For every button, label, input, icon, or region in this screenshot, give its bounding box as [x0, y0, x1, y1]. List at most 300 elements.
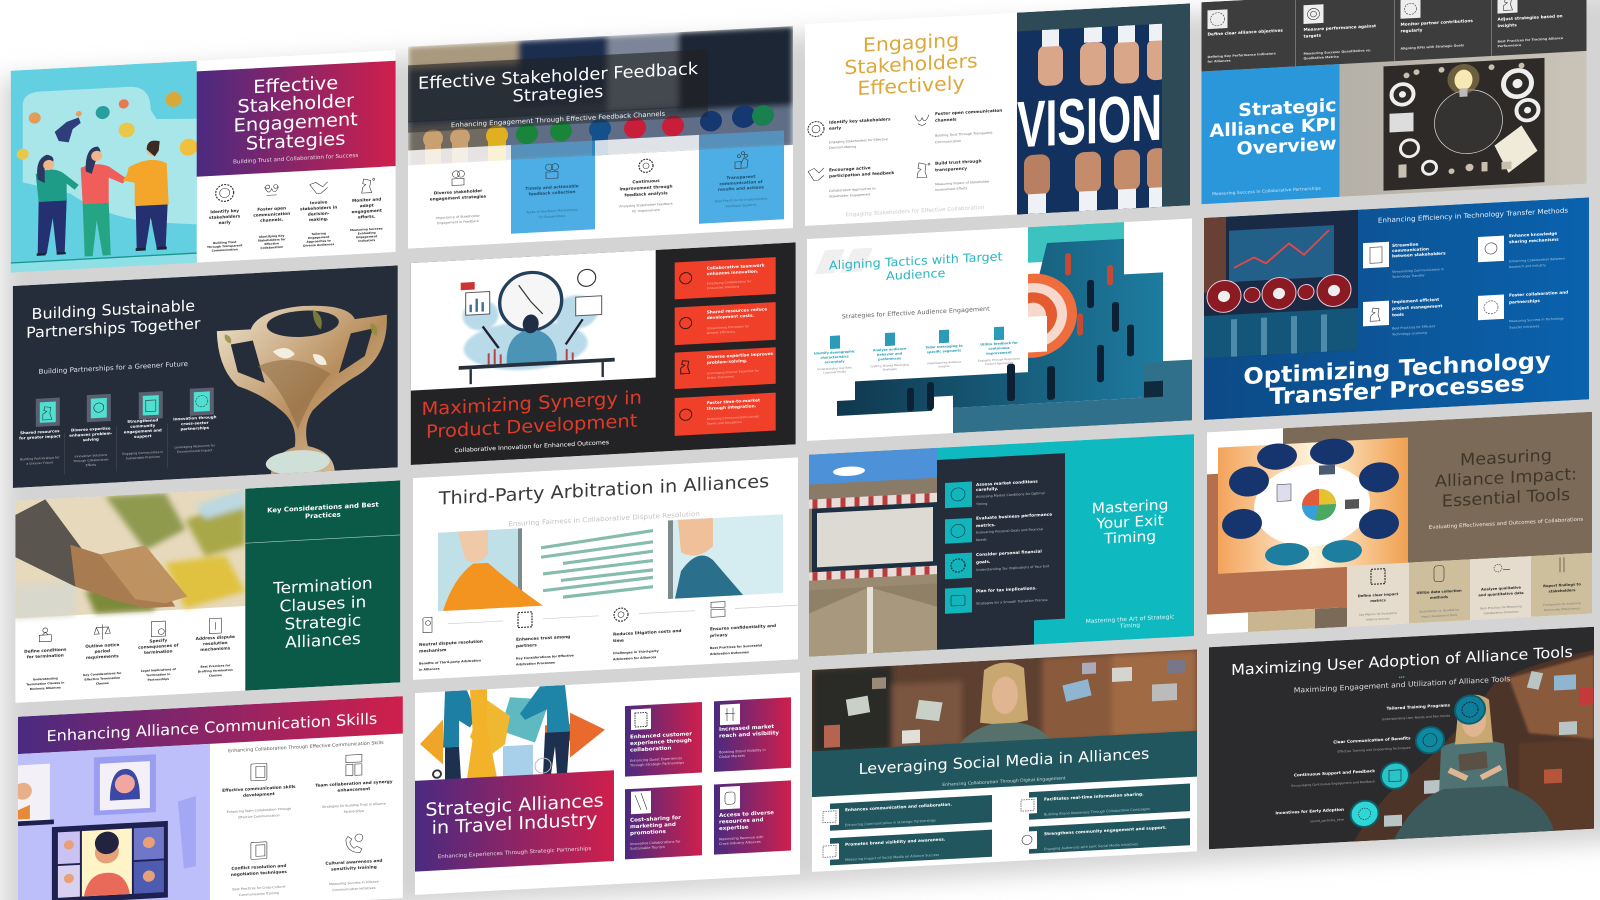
slide: Effective Stakeholder Feedback Strategies: feedback collection	[528, 189, 576, 196]
card: brand visibility	[820, 830, 992, 866]
slide: Effective Stakeholder Feedback Strategies: Best Practices for Implementing	[715, 197, 767, 203]
slide: Engaging Stakeholders Effectively: Measuring Impact of Stakeholder	[935, 180, 989, 186]
illustration: two people and document lines	[438, 514, 783, 611]
slide: Measuring Alliance Impact: Impact Assessment Tools	[1421, 613, 1458, 619]
slide: Aligning Tactics with Target Audience: Engaging Through Responsive	[978, 357, 1020, 363]
slide: Optimizing Technology Transfer Processes: Best Practices for Efficient	[1392, 324, 1435, 330]
item details: Understanding	[33, 676, 58, 681]
slide: Termination Clauses in Strategic Alliances: resolution	[203, 640, 228, 646]
card 3: promotions	[630, 829, 666, 837]
item labels: mechanism	[419, 647, 446, 653]
title: Measuring	[1460, 446, 1552, 470]
slide: Third-Party Arbitration in Alliances: privacy	[710, 632, 728, 638]
photo: targets and bulb board	[1384, 58, 1544, 191]
icons	[808, 115, 930, 184]
icons	[830, 327, 1004, 349]
card: brand visibility: Promotes brand visibility and awareness.	[845, 837, 946, 847]
slide: Maximizing User Adoption of Alliance Tools: Encouraging Continuous Engagement and Feedback	[1291, 780, 1375, 788]
circle icons	[1359, 702, 1478, 820]
slide: Strategic Alliance KPI Overview: Aligning KPIs with Strategic Goals	[1401, 43, 1464, 51]
card 1: Enhanced customer	[630, 731, 692, 740]
item details: Engaging Stakeholders for Effective	[829, 137, 888, 144]
card: real-time sharing: Facilitates real-time information sharing.	[1044, 791, 1144, 802]
subtitle: Enhancing Experiences Through Strategic Partnerships	[438, 846, 591, 860]
title: Clauses in	[280, 593, 366, 616]
item details: Decision-Making	[829, 145, 856, 150]
slide: Third-Party Arbitration in Alliances: Arbitration Outcomes	[710, 650, 749, 656]
subtitle: Enhancing Collaboration Through Digital Engagement	[942, 776, 1066, 788]
subtitle: Enhancing Engagement Through Effective Feedback Channels	[451, 110, 666, 129]
slide: Strategic Alliance KPI Overview: targets	[1304, 33, 1322, 39]
slide: Termination Clauses in Strategic Alliances: period	[95, 648, 110, 654]
title panel	[415, 770, 614, 872]
slide: Mastering Your Exit Timing: Needs	[976, 538, 987, 542]
slide: Third-Party Arbitration in Alliances: Challenges in Third-party	[613, 649, 659, 655]
card 3	[625, 785, 702, 859]
slide: Building Sustainable Partnerships Together: Efforts	[86, 463, 96, 467]
slide: Measuring Alliance Impact: Best Practices for Measuring	[1480, 604, 1522, 610]
slide: Termination Clauses in Strategic Alliances: Drafting Termination	[198, 668, 233, 674]
card 2: Greater Efficiency	[707, 330, 735, 335]
item details: Key Metrics for Evaluating	[1359, 611, 1397, 617]
item labels: Tailored Training Programs	[1387, 703, 1451, 711]
slide: Effective Stakeholder Feedback Strategies: for Improvement	[632, 208, 661, 213]
title: Mastering	[1092, 496, 1168, 517]
title: Overview	[1236, 134, 1337, 160]
title: Alliance KPI	[1210, 115, 1337, 142]
card: real-time sharing: Building Brand Awareness Through Collaborative Campaigns	[1044, 807, 1150, 817]
footer: Engaging Stakeholders for Effective Collaboration	[846, 205, 984, 218]
title: Effective Stakeholder Feedback	[418, 60, 698, 94]
subtitle: Timing	[1119, 623, 1140, 630]
item labels: metrics	[1370, 598, 1386, 603]
slide: Effective Stakeholder Engagement Strategies: channels.	[260, 217, 284, 223]
title: Stakeholder	[237, 90, 354, 118]
subtitle: Building Trust and Collaboration for Success	[233, 153, 358, 165]
slide: Maximizing User Adoption of Alliance Tools: Incentives for Early Adoption	[1275, 807, 1344, 815]
item details: Effective Communication	[238, 813, 280, 819]
teal icon tiles	[945, 482, 972, 614]
slide: Aligning Tactics with Target Audience: behavior and	[877, 352, 903, 357]
slide: Mastering Your Exit Timing: Understanding Tax Implications of Your Exit	[976, 564, 1050, 572]
icon row	[216, 177, 375, 202]
item labels: Define conditions	[24, 647, 66, 654]
slide: Building Sustainable Partnerships Together: Engaging Communities in	[122, 450, 163, 456]
illustration: video call	[14, 744, 210, 900]
slide: Optimizing Technology Transfer Processes: Enhancing Collaboration Between	[1509, 257, 1565, 263]
title: Transfer Processes	[1269, 370, 1525, 410]
card 3: Cost-sharing for	[630, 815, 681, 824]
slide: Effective Stakeholder Engagement Strategies: Diverse Audiences	[303, 242, 335, 248]
slide: Effective Stakeholder Feedback Strategies: communication of	[719, 179, 763, 186]
slide: Effective Stakeholder Engagement Strategies: Approaches to	[307, 239, 331, 244]
slide: Building Sustainable Partnerships Together	[13, 265, 398, 490]
photo: VISION with hands	[1017, 23, 1167, 215]
slide: Effective Stakeholder Engagement Strategies: stakeholders in	[300, 205, 337, 211]
connector lines	[448, 605, 798, 624]
card: communication: Enhancing Communication in Strategic Partnerships	[845, 818, 936, 827]
item labels: Effective communication skills	[222, 784, 296, 793]
photo: handshake over map	[15, 489, 245, 619]
slide: Maximizing User Adoption of Alliance Tools	[1209, 627, 1594, 849]
slide: Measuring Alliance Impact: stakeholders	[1549, 588, 1575, 594]
card 2: development costs.	[707, 313, 755, 320]
slide: Effective Stakeholder Feedback Strategies: results and actions	[718, 185, 765, 192]
title band	[197, 61, 396, 177]
item details: Understanding User Needs and Pain Points	[1382, 714, 1450, 721]
item labels: engagement strategies	[430, 194, 487, 202]
card 4: expertise	[719, 825, 749, 832]
illustration: three people shaking hands	[11, 61, 198, 273]
item details: Importance of Stakeholder	[436, 214, 480, 220]
card 1	[625, 702, 702, 777]
slide: Engaging Stakeholders Effectively: Encourage active	[829, 165, 871, 172]
title: Optimizing Technology	[1243, 347, 1551, 390]
slide: Optimizing Technology Transfer Processes: Technology Licensing	[1391, 331, 1427, 337]
slide: Aligning Tactics with Target Audience: Crafting Tailored Messaging	[870, 362, 909, 368]
slide: Enhancing Alliance Communication Skills: Partnerships	[344, 809, 364, 814]
slide: Building Sustainable Partnerships Together: solving	[83, 436, 99, 442]
panel heading: Practices	[305, 511, 341, 520]
slide: Termination Clauses in Strategic Alliances	[15, 480, 400, 703]
teal circles	[1351, 695, 1485, 828]
photo: meeting with colored pegs	[408, 26, 793, 168]
subtitle: Measuring Success in Collaborative Partnerships	[1212, 186, 1322, 197]
slide: Effective Stakeholder Engagement Strategies: Effective	[264, 241, 279, 246]
slide: Enhancing Alliance Communication Skills	[14, 696, 403, 900]
slide: Enhancing Alliance Communication Skills: Conflict resolution and	[231, 863, 286, 871]
title: Strategies	[246, 128, 345, 155]
slide: Mastering Your Exit Timing: Plan for tax implications.	[976, 585, 1037, 594]
card 3: marketing and	[630, 822, 676, 830]
item details: a Greener Future	[26, 460, 53, 466]
slide: Third-Party Arbitration in Alliances: Arbitration for Alliances	[613, 655, 656, 661]
slide: Building Sustainable Partnerships Together: Diverse expertise	[71, 426, 111, 433]
item labels: between stakeholders	[1392, 251, 1446, 258]
item details: Communication	[212, 247, 238, 253]
item labels: accurately	[825, 359, 845, 364]
icons	[251, 754, 363, 859]
title: Building Sustainable	[32, 297, 195, 323]
slide: Optimizing Technology Transfer Processes: sharing mechanisms	[1509, 237, 1559, 244]
slide: Building Sustainable Partnerships Together: enhances problem-	[69, 431, 113, 438]
slide: Third-Party Arbitration in Alliances: Key Considerations for Effective	[516, 653, 574, 660]
card: communication	[820, 795, 992, 831]
slide: Optimizing Technology Transfer Processes: project management	[1392, 303, 1442, 311]
slide: Enhancing Alliance Communication Skills: Team collaboration and synergy	[315, 779, 393, 788]
slide: Leveraging Social Media in Alliances	[812, 649, 1197, 872]
slide: Termination Clauses in Strategic Alliances: Key Considerations for	[83, 671, 121, 677]
slide: Termination Clauses in Strategic Alliances: Specify	[149, 638, 167, 643]
item labels: Diverse stakeholder	[434, 188, 482, 196]
card 2: Global Markets	[719, 754, 745, 759]
card 2: Streamlining Processes for	[707, 324, 749, 330]
slide: Building Sustainable Partnerships Together: Innovation through	[173, 414, 216, 421]
item details: Alliance Success	[1366, 616, 1390, 622]
illustration: person at desk with clock	[459, 268, 615, 385]
slide: Third-Party Arbitration in Alliances: time	[613, 638, 624, 643]
slide: Termination Clauses in Strategic Alliances: Effective Termination	[84, 676, 120, 682]
slide: Strategic Alliance KPI Overview: Measuring Success: Quantitative vs.	[1304, 48, 1371, 56]
title panel	[1202, 64, 1340, 204]
slide: Engaging Stakeholders Effectively: Communication	[935, 139, 961, 144]
slide: Third-Party Arbitration in Alliances: Ensures confidentiality and	[710, 623, 776, 631]
item details: Engagement in Feedback	[437, 219, 479, 225]
slide: Aligning Tactics with Target Audience: Insights	[939, 364, 950, 369]
card 1	[675, 257, 776, 299]
panel divider	[245, 535, 400, 543]
photo: meeting around a table from above	[1218, 435, 1408, 574]
title: Third-Party Arbitration in Alliances	[438, 472, 769, 510]
white text panel	[807, 263, 1028, 370]
slide: Effective Stakeholder Feedback Strategies: feedback analysis	[624, 190, 668, 197]
slide: Maximizing User Adoption of Alliance Tools: Clear Communication of Benefits	[1333, 735, 1411, 744]
photo: woman among photographs	[812, 649, 1197, 754]
item details: Benefits of Third-party Arbitration	[419, 658, 481, 666]
top labels: Define clear alliance objectives	[1208, 28, 1284, 37]
slide: Optimizing Technology Transfer Processes: Research and Industry	[1509, 263, 1546, 269]
title: Alliances	[285, 629, 361, 652]
slide: Aligning Tactics with Target Audience: improvement	[986, 350, 1012, 356]
brown panel	[1283, 412, 1592, 569]
title: in Travel Industry	[432, 810, 597, 839]
slide: Aligning Tactics with Target Audience: Utilize feedback for	[980, 341, 1018, 347]
icons	[39, 618, 221, 643]
slide: Engaging Stakeholders Effectively: channels	[935, 117, 957, 123]
slide: Maximizing User Adoption of Alliance Tools: Continuous Support and Feedback	[1294, 768, 1375, 777]
slide: Mastering Your Exit Timing: Evaluating Personal Goals and Financial	[976, 527, 1043, 535]
slide: Engaging Stakeholders Effectively: Building Trust Through Transparent	[935, 131, 993, 138]
slide: Third-Party Arbitration in Alliances	[413, 457, 798, 680]
card 3	[675, 347, 776, 389]
subtitle: Mastering the Art of Strategic	[1086, 615, 1174, 625]
slide: Termination Clauses in Strategic Alliances: Clauses	[209, 673, 222, 678]
icons	[1371, 557, 1564, 585]
slide: Engaging Stakeholders Effectively: Stakeholder Engagement	[829, 192, 871, 199]
item labels: Streamline	[1392, 242, 1418, 248]
slide: Building Sustainable Partnerships Together: partnerships	[180, 425, 210, 431]
slide: Termination Clauses in Strategic Alliances: Clauses	[96, 681, 109, 686]
slide: Optimizing Technology Transfer Processes: partnerships	[1509, 298, 1540, 305]
quote mark decoration	[807, 248, 873, 293]
slide: Effective Stakeholder Engagement Strategies: Tailoring	[311, 231, 326, 236]
slide: Effective Stakeholder Engagement Strategies: Stakeholders for	[258, 237, 286, 243]
card 1: Enhancing Guest Experiences	[630, 756, 682, 763]
item labels: early	[829, 125, 841, 131]
slide: Effective Stakeholder Engagement Strategies: communication	[253, 211, 290, 218]
slide: Termination Clauses in Strategic Alliances: Partnerships	[148, 677, 169, 682]
subtitle: Enhancing Collaboration Through Effective Communication Skills	[228, 740, 384, 754]
item details: Business Alliances	[30, 685, 61, 691]
slide: Third-Party Arbitration in Alliances: Best Practices for Successful	[710, 643, 762, 650]
card 2: Increased market	[719, 724, 774, 733]
item details: Assessing Market Conditions for Optimal	[976, 491, 1045, 499]
item details: Technology Transfer	[1391, 273, 1425, 279]
slide: Third-Party Arbitration in Alliances: partners	[516, 642, 537, 648]
photo: crowd and target	[837, 237, 1163, 416]
slide: Enhancing Alliance Communication Skills: negotiation techniques	[231, 869, 287, 877]
card: community: Strengthens community engagement and support.	[1044, 825, 1167, 836]
slide: Mastering Your Exit Timing: Strategies for a Smooth Transition Process	[976, 598, 1048, 606]
slide: Optimizing Technology Transfer Processes: Transfer Initiatives	[1508, 324, 1540, 330]
slide: Maximizing User Adoption of Alliance Tools: sound_particles_here	[1310, 818, 1344, 823]
slide: Effective Stakeholder Feedback Strategies: Feedback Systems	[726, 203, 757, 208]
card 1: Employing Collaboration for	[707, 279, 751, 286]
slide: Termination Clauses in Strategic Alliances: Legal Implications of	[141, 667, 176, 673]
card 1: experience through	[630, 738, 692, 747]
slide: Measuring Alliance Impact: Collaborative Outcomes	[1484, 610, 1519, 615]
title: Leveraging Social Media in Alliances	[859, 745, 1149, 778]
slide: Termination Clauses in Strategic Alliances: Outline notice	[85, 642, 119, 649]
slide: Engaging Stakeholders Effectively: Collaborative Approaches to	[829, 187, 876, 193]
item details: Termination Clauses in	[26, 681, 64, 687]
title: Your Exit	[1095, 512, 1164, 533]
slide: Aligning Tactics with Target Audience: Understanding Audience	[927, 360, 961, 365]
panel heading: Key Considerations and Best	[267, 501, 379, 514]
card 4: Reducing Communication Across	[707, 414, 759, 421]
slide: Effective Stakeholder Engagement Strategies: Foster open	[257, 205, 286, 212]
slide: Termination Clauses in Strategic Alliances: mechanisms	[200, 645, 231, 652]
item labels: Neutral dispute resolution	[419, 639, 483, 647]
photo: targets and chart screen	[1204, 210, 1358, 358]
top details: for Alliances	[1207, 59, 1231, 64]
card 3: Sustainable Tourism	[630, 845, 665, 851]
card: community	[1018, 818, 1190, 854]
slide: Termination Clauses in Strategic Alliances: Best Practices for	[200, 663, 230, 669]
slide: Mastering Your Exit Timing	[809, 434, 1194, 657]
slide: Effective Stakeholder Engagement Strategies: engagement	[351, 208, 382, 214]
slide: Effective Stakeholder Feedback Strategies: Transparent	[726, 174, 756, 180]
card 4	[675, 393, 776, 436]
slide: Strategic Alliance KPI Overview: Performance	[1498, 43, 1521, 48]
top details: Defining Key Performance Indicators	[1208, 52, 1276, 59]
title: Strategies	[513, 82, 603, 107]
slide: Optimizing Technology Transfer Processes: Implement efficient	[1392, 297, 1439, 304]
slide: Aligning Tactics with Target Audience: Content Approaches	[985, 361, 1014, 366]
item labels: Identify key	[210, 208, 239, 214]
card 4: Cross-Industry Alliances	[719, 840, 761, 846]
slide: Third-Party Arbitration in Alliances: Reduces litigation costs and	[613, 628, 681, 637]
card 4: Maximizing Revenue with	[719, 835, 764, 841]
blue corner block	[953, 360, 1192, 433]
green panel	[245, 480, 400, 691]
icons	[423, 602, 725, 633]
slide: Termination Clauses in Strategic Alliances: Termination in	[146, 672, 170, 677]
slide: Measuring Alliance Impact	[1207, 412, 1592, 634]
slide: Building Sustainable Partnerships Together: cross-sector	[181, 420, 209, 426]
slide: Effective Stakeholder Engagement Strategies: Collaboration	[260, 245, 283, 250]
slide: Effective Stakeholder Feedback Strategies: improvement through	[619, 184, 673, 191]
slide: Strategic Alliance KPI Overview: Best Practices for Tracking Alliance	[1498, 36, 1563, 44]
slide: Effective Stakeholder Engagement Strategies: Engagement	[356, 234, 378, 239]
slide: Aligning Tactics with Target Audience	[807, 218, 1192, 441]
slide: Effective Stakeholder Feedback Strategies: Types of Feedback Mechanisms	[526, 208, 578, 214]
slide: Aligning Tactics with Target Audience: Tailor messaging to	[925, 344, 963, 350]
card 1: collaboration	[630, 746, 672, 754]
card 2: Shared resources reduce	[707, 306, 767, 315]
card: communication: Enhances communication and collaboration.	[845, 802, 952, 812]
dark panel	[937, 453, 1065, 650]
illustration: handshake travel	[420, 683, 605, 783]
item details: in Alliances	[419, 667, 440, 672]
slide: Aligning Tactics with Target Audience: Strategies	[882, 367, 897, 372]
slide: Enhancing Alliance Communication Skills: Strategies for Building Trust in Alliance	[322, 802, 386, 809]
columns	[408, 130, 793, 249]
slide: Enhancing Alliance Communication Skills: Communication Initiatives	[332, 886, 376, 892]
slide: Optimizing Technology Transfer Processes: Foster collaboration and	[1509, 290, 1568, 298]
item labels: Assess market conditions	[976, 479, 1038, 487]
terracotta block	[1207, 467, 1347, 615]
subtitle band	[408, 105, 708, 133]
subtitle: Evaluating Effectiveness and Outcomes of Collaborations	[1429, 517, 1583, 531]
top band	[1202, 0, 1586, 71]
slide: Measuring Alliance Impact: Utilize data collection	[1416, 589, 1462, 595]
slide: Aligning Tactics with Target Audience: preferences	[878, 356, 901, 361]
item labels: characteristics	[820, 354, 849, 360]
slide: Optimizing Technology Transfer Processes	[1204, 197, 1589, 420]
slide: Building Sustainable Partnerships Together: Sustainable Practices	[126, 455, 160, 460]
card 4	[714, 780, 791, 855]
item labels: Identify key stakeholders	[829, 117, 891, 125]
subtitle: Maximizing Engagement and Utilization of Alliance Tools	[1294, 674, 1510, 695]
title: Alliance Impact:	[1435, 465, 1577, 492]
slide: Termination Clauses in Strategic Alliances: termination	[144, 649, 173, 655]
slide: Measuring Alliance Impact: Analyze qualitative	[1481, 586, 1521, 592]
subtitle: Strategies for Effective Audience Engagement	[842, 306, 990, 320]
slide: Engaging Stakeholders Effectively	[805, 3, 1190, 226]
slide: Effective Stakeholder Engagement Strategies: efforts.	[358, 214, 376, 220]
teal band	[812, 731, 1197, 797]
slide: Optimizing Technology Transfer Processes: Enhance knowledge	[1509, 231, 1557, 238]
title: Audience	[886, 265, 945, 283]
slide: Mastering Your Exit Timing: metrics.	[976, 522, 996, 528]
slide: Strategic Alliance KPI Overview: Adjust strategies based on	[1498, 13, 1563, 22]
card: brand visibility: Measuring Impact of Social Media on Alliance Success	[845, 853, 939, 862]
item labels: early	[219, 220, 231, 225]
icon tiles	[1363, 236, 1504, 326]
title: Strategic	[1238, 96, 1336, 121]
item labels: Identify demographic	[814, 349, 855, 356]
slide: Measuring Alliance Impact: Quantitative vs. Qualitative	[1419, 608, 1459, 614]
card 1: Innovative Solutions	[707, 285, 740, 290]
title: Maximizing Synergy in	[422, 387, 642, 420]
slide: Maximizing Synergy in Product Development	[411, 242, 796, 465]
slide: Measuring Alliance Impact: methods	[1430, 595, 1448, 600]
slide: Enhancing Alliance Communication Skills: Best Practices for Cross-Cultural	[232, 885, 285, 891]
title: Engaging	[863, 29, 959, 57]
item details: Understanding Your Best	[817, 366, 852, 371]
card 2: reach and visibility	[719, 730, 780, 739]
title: Aligning Tactics with Target	[829, 249, 1002, 273]
subtitle: Ensuring Fairness in Collaborative Dispute Resolution	[508, 510, 700, 528]
card 3: Better Outcomes	[707, 375, 734, 380]
title: Essential Tools	[1442, 485, 1570, 512]
title banner	[408, 49, 708, 122]
slide: Engaging Stakeholders Effectively: participation and feedback	[829, 170, 894, 178]
card 3: problem-solving.	[707, 358, 748, 365]
card 4: Faster time-to-market	[707, 398, 760, 405]
slide: Termination Clauses in Strategic Alliances: consequences of	[138, 643, 179, 650]
item labels: Define clear impact	[1358, 592, 1398, 598]
side panel	[1017, 3, 1190, 215]
title: Stakeholders	[844, 50, 978, 79]
photo: woman with tablet among photographs	[1354, 650, 1594, 842]
title: Maximizing User Adoption of Alliance Tools	[1231, 643, 1573, 679]
photo: VISION with hands: VISION	[1017, 82, 1162, 162]
slide: Mastering Your Exit Timing: goals.	[976, 559, 991, 565]
white icon tiles	[1208, 0, 1518, 29]
slide: Effective Stakeholder Engagement Strategies: making.	[309, 216, 329, 222]
